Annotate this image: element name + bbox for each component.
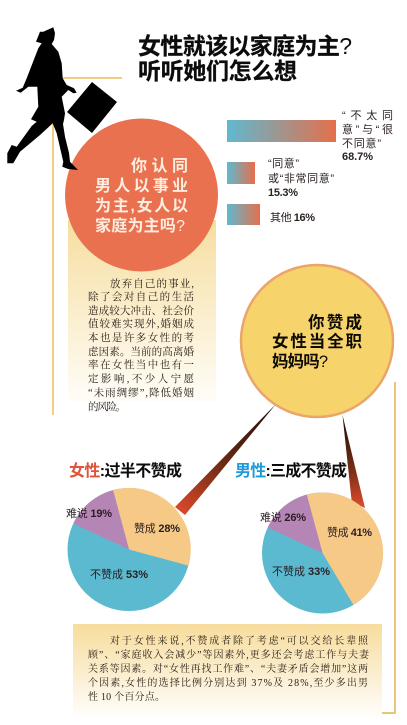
text block: career commentary: 虑因素。当前的高离婚 (88, 345, 194, 358)
pie chart: female: 不赞成 53% (90, 568, 148, 581)
title (138, 33, 352, 84)
pie chart: male (260, 492, 383, 614)
arrow: wedge to female pie (175, 404, 276, 515)
icon: silhouette of walking woman with briefcase (7, 27, 117, 170)
panel: career question background (68, 220, 216, 402)
panel: bottom commentary (73, 624, 382, 720)
decorative frame: left and top lines (52, 77, 122, 415)
orange circle question: 你认同 (131, 157, 188, 175)
text block: career commentary: 除了会对自己的生活 (88, 290, 194, 303)
pie chart: male: 不赞成 33% (272, 565, 330, 578)
yellow circle question: 妈妈吗? (272, 352, 328, 371)
text block: career commentary: 率在女性当中也有一 (88, 358, 194, 371)
panel: bottom commentary: 关系等因素。对“女性再找工作难”、“夫妻矛盾会增加”这两 (88, 662, 368, 675)
yellow circle question (241, 265, 393, 417)
pie chart: male: 难说 26% (260, 510, 306, 524)
decorative frame: right and bottom lines (327, 382, 396, 714)
orange circle question (65, 118, 218, 272)
arrow: wedge to male pie (342, 415, 365, 508)
bar chart: attitudes: 不同意” (342, 136, 381, 150)
text block: career commentary: 定影响,不少人宁愿 (88, 372, 194, 385)
heading: female: 女性:过半不赞成 (69, 461, 182, 480)
text block: career commentary: 造成较大冲击、社会价 (88, 304, 194, 317)
panel: bottom commentary: 个因素,女性的选择比例分别达到 37%及 28%,至少多出男 (88, 676, 368, 689)
panel: bottom commentary: 对于女性来说,不赞成者除了考虑“可以交给长辈照 (110, 634, 369, 647)
panel: bottom commentary: 顾”、“家庭收入会减少”等因素外,更多还会考虑工作与夫妻 (88, 648, 370, 661)
title: 女性就该以家庭为主? (138, 33, 352, 59)
text block: career commentary: 的风险。 (88, 400, 126, 413)
bar chart: attitudes: “同意” (268, 156, 299, 170)
text block: career commentary (88, 277, 194, 413)
bar chart: attitudes: 或“非常同意” (268, 171, 334, 185)
pie chart: female (66, 488, 191, 611)
yellow circle question: 你赞成 (308, 312, 362, 332)
bar chart: attitudes: “不太同 (342, 109, 393, 122)
bar chart: attitudes (227, 109, 393, 225)
orange circle question: 家庭为主吗? (95, 216, 185, 235)
text block: career commentary: 值较难实现外,婚姻成 (88, 317, 194, 330)
orange circle question: 为主,女人以 (95, 196, 188, 215)
pie chart: female: 难说 19% (66, 506, 112, 520)
pie chart: female: 赞成 28% (134, 522, 180, 535)
bar chart: attitudes: 其他 16% (270, 211, 315, 224)
yellow circle question: 女性当全职 (272, 331, 362, 351)
heading: male: 男性:三成不赞成 (235, 461, 347, 480)
text block: career commentary: 本也是许多女性的考 (88, 331, 194, 344)
panel: bottom commentary: 性 10 个百分点。 (88, 690, 165, 703)
bar chart: attitudes: 68.7% (342, 151, 373, 163)
text block: career commentary: “未雨绸缪”,降低婚姻 (88, 386, 194, 399)
bar chart: attitudes: 意”与“很 (342, 122, 393, 136)
bar chart: attitudes: 15.3% (268, 187, 298, 199)
title: 听听她们怎么想 (138, 58, 297, 84)
text block: career commentary: 放弃自己的事业, (110, 277, 194, 290)
orange circle question: 男人以事业 (95, 176, 188, 195)
pie chart: male: 赞成 41% (327, 526, 372, 539)
